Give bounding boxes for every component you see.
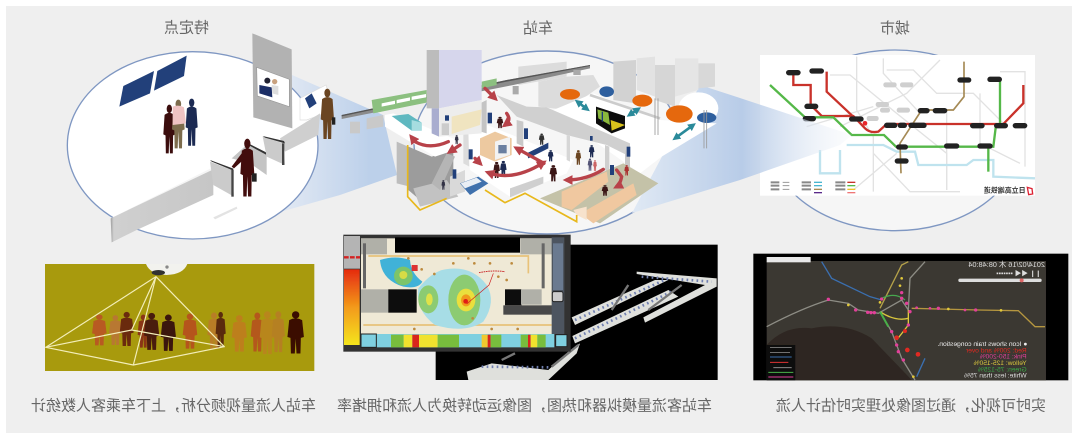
- attendant: [321, 89, 335, 139]
- blue wall signs: [445, 113, 630, 179]
- group of three passengers: [163, 99, 198, 153]
- central concourse floor: [463, 123, 573, 197]
- congestion legend: Pink: 150-200%: [980, 354, 1027, 361]
- station tower: [427, 50, 482, 137]
- grey stair connectors: [502, 285, 682, 367]
- pedestrians dots: [407, 257, 519, 330]
- yellow underground walkway: [408, 145, 577, 222]
- time playback: ❙❙ ◀◀ ▪▪▪▪▪▪▪: [996, 270, 1041, 278]
- red congestion train icons: [894, 329, 920, 357]
- congestion legend: Yellow: 125-150%: [974, 360, 1027, 367]
- right control column: [552, 237, 564, 334]
- walkway railings and crowds: [482, 277, 712, 367]
- plan walls and dark areas: [361, 237, 553, 325]
- brown line: [900, 62, 964, 173]
- elevated rail and piers: [342, 65, 590, 133]
- escalator hall: [413, 153, 465, 207]
- red line: [793, 72, 1023, 132]
- current location marker: [863, 121, 867, 126]
- node poles: [655, 98, 707, 148]
- time playback: [958, 260, 1045, 282]
- grey background lines: [807, 57, 1025, 192]
- time playback: 2014/02/16 木 08:48:04: [968, 260, 1045, 269]
- caption: people counting: 车站人流量视频分析，上下车乘客人数统计: [31, 398, 316, 414]
- green trains: [372, 78, 497, 113]
- ticket gates: [210, 136, 285, 197]
- title tag: [767, 257, 811, 262]
- map operator logo: 日立高端铁道: [984, 185, 1026, 194]
- title: fixed point: 特定点: [164, 20, 209, 36]
- panel: real-time congestion map: [753, 254, 1068, 380]
- congestion legend: White: less than 75%: [964, 373, 1027, 380]
- railway lines: [767, 262, 1045, 380]
- tan shop counters: [562, 172, 637, 223]
- background buildings: [518, 57, 715, 110]
- tan shop block: [480, 132, 512, 162]
- red passenger flow arrows: [412, 88, 622, 187]
- left scale column: [344, 236, 360, 345]
- projection cone: station to city: [632, 85, 852, 213]
- ceiling camera: [146, 264, 187, 275]
- panel: people counting camera view: [45, 264, 314, 371]
- kiosk: [300, 85, 333, 120]
- pink congestion train icons: [827, 291, 977, 362]
- station ellipse: [414, 51, 680, 234]
- blue nodes: [599, 86, 716, 123]
- underground structure: [397, 142, 453, 200]
- panel: station cutaway: [342, 50, 718, 223]
- congestion legend: [937, 341, 1027, 380]
- camera field-of-view wireframe: [46, 277, 224, 365]
- heat blobs: [380, 257, 505, 329]
- yellow train icons: [847, 277, 1002, 378]
- map sheet: [760, 55, 1035, 196]
- white station walkways: [467, 272, 717, 380]
- long barrier wall: [111, 113, 320, 242]
- line legend: [767, 345, 795, 380]
- heat-map window frame: [343, 235, 571, 352]
- muted station pills: [867, 82, 913, 121]
- black 3D view: [436, 245, 718, 380]
- bay dark area: [767, 326, 912, 380]
- teal connection arrows: [577, 102, 693, 138]
- spotlight ellipse: [67, 52, 318, 239]
- left platform: [385, 113, 457, 157]
- congestion legend: ● Icon shows train congestion.: [937, 341, 1027, 348]
- map operator logo: [984, 185, 1033, 195]
- bus: [596, 107, 625, 133]
- lower congestion strip: [361, 334, 567, 347]
- little passengers in station: [441, 117, 629, 196]
- lower beige floor: [540, 163, 658, 223]
- panel: fixed point scene: [67, 33, 335, 242]
- green line: [770, 80, 1000, 172]
- olive background: [45, 264, 314, 371]
- station floor plan: [361, 238, 553, 334]
- city ellipse: [770, 50, 1020, 231]
- panel: 3D pedestrian simulator: [343, 235, 718, 380]
- grey information pillar with video: [252, 33, 292, 128]
- congestion legend: Green: 75-125%: [978, 366, 1027, 373]
- caption: real-time visualization: 实时可视化，通过图像处理实时估计人流: [776, 398, 1046, 414]
- overhead blue signs: [119, 56, 187, 107]
- projection cone: point to station: [280, 75, 397, 212]
- river: [820, 145, 1035, 178]
- title: station: 车站: [523, 20, 553, 37]
- red marker: [412, 265, 418, 271]
- map legend: [771, 182, 855, 193]
- blue shuttle: [460, 177, 488, 195]
- panel: city subway map: [760, 50, 1035, 231]
- congestion legend: Red: 200% and over: [965, 347, 1027, 354]
- silhouettes of passengers: [92, 311, 304, 354]
- floor mark: [213, 207, 237, 219]
- station pills: [786, 68, 1027, 164]
- dark land map: [767, 261, 1046, 380]
- orange nodes: [560, 89, 693, 123]
- passenger at gate: [232, 139, 257, 196]
- black frame: [753, 254, 1068, 380]
- title: city: 城市: [880, 20, 910, 37]
- caption: simulator: 车站客流量模拟器和热图，图像运动转换为人流和拥堵率: [337, 398, 712, 414]
- upper deck walls: [463, 95, 630, 173]
- plaza and dome: [553, 92, 718, 173]
- teal train: [392, 114, 422, 131]
